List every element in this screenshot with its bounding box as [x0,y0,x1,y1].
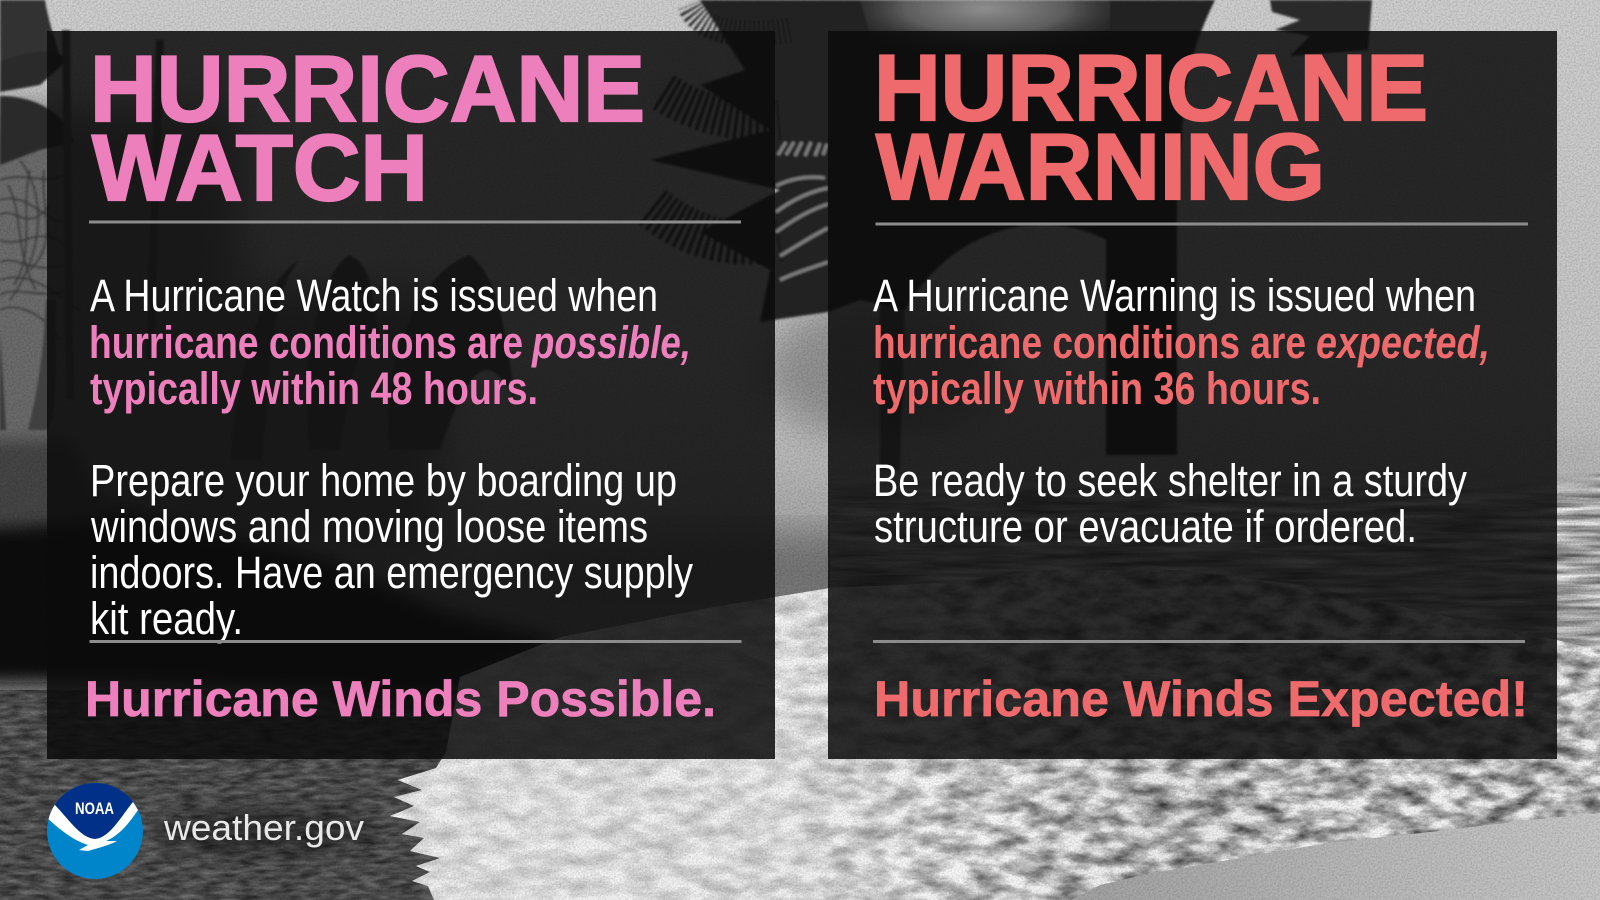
text block: warning shelter advice: structure or evacuate if ordered. [874,501,1417,552]
heading: hurricane warning: HURRICANE [874,35,1428,140]
heading: hurricane watch [90,36,645,220]
icon: NOAA logo [47,783,143,879]
text block: watch preparation advice: windows and moving loose items [90,501,648,552]
text block: warning definition [873,270,1490,414]
text block: watch definition: A Hurricane Watch is issued when [90,270,658,321]
text block: warning definition: A Hurricane Warning is issued when [873,270,1476,321]
summary: hurricane winds possible: Hurricane Winds Possible. [85,671,716,727]
heading: hurricane watch: HURRICANE [90,36,645,141]
panel: hurricane watch [47,31,775,759]
text block: warning shelter advice [873,455,1467,552]
text block: watch definition [89,270,691,414]
panel: hurricane warning [828,31,1557,759]
text block: watch preparation advice: Prepare your home by boarding up [90,455,677,506]
heading: hurricane warning: WARNING [876,114,1325,219]
divider: under watch heading [89,220,741,224]
text block: warning definition: typically within 36 hours. [873,363,1321,414]
text block: warning definition: hurricane conditions are [873,317,1306,368]
footer: weather.gov link: weather.gov [163,807,364,848]
text block: watch definition: hurricane conditions are [89,317,523,368]
heading: hurricane watch: WATCH [92,115,428,220]
text block: warning definition: expected, [1316,317,1490,368]
summary: hurricane winds expected: Hurricane Winds Expected! [874,671,1528,727]
text block: watch definition: typically within 48 hours. [90,363,538,414]
divider: above watch summary [90,640,742,643]
icon: NOAA logo: NOAA [75,799,114,818]
text block: watch preparation advice: kit ready. [90,593,243,644]
text block: warning shelter advice: Be ready to seek shelter in a sturdy [873,455,1467,506]
text block: watch preparation advice: indoors. Have an emergency supply [90,547,693,598]
divider: under warning heading [876,222,1528,226]
text block: watch definition: possible, [531,317,691,368]
text block: watch preparation advice [90,455,693,644]
heading: hurricane warning [874,35,1428,219]
divider: above warning summary [873,640,1525,643]
